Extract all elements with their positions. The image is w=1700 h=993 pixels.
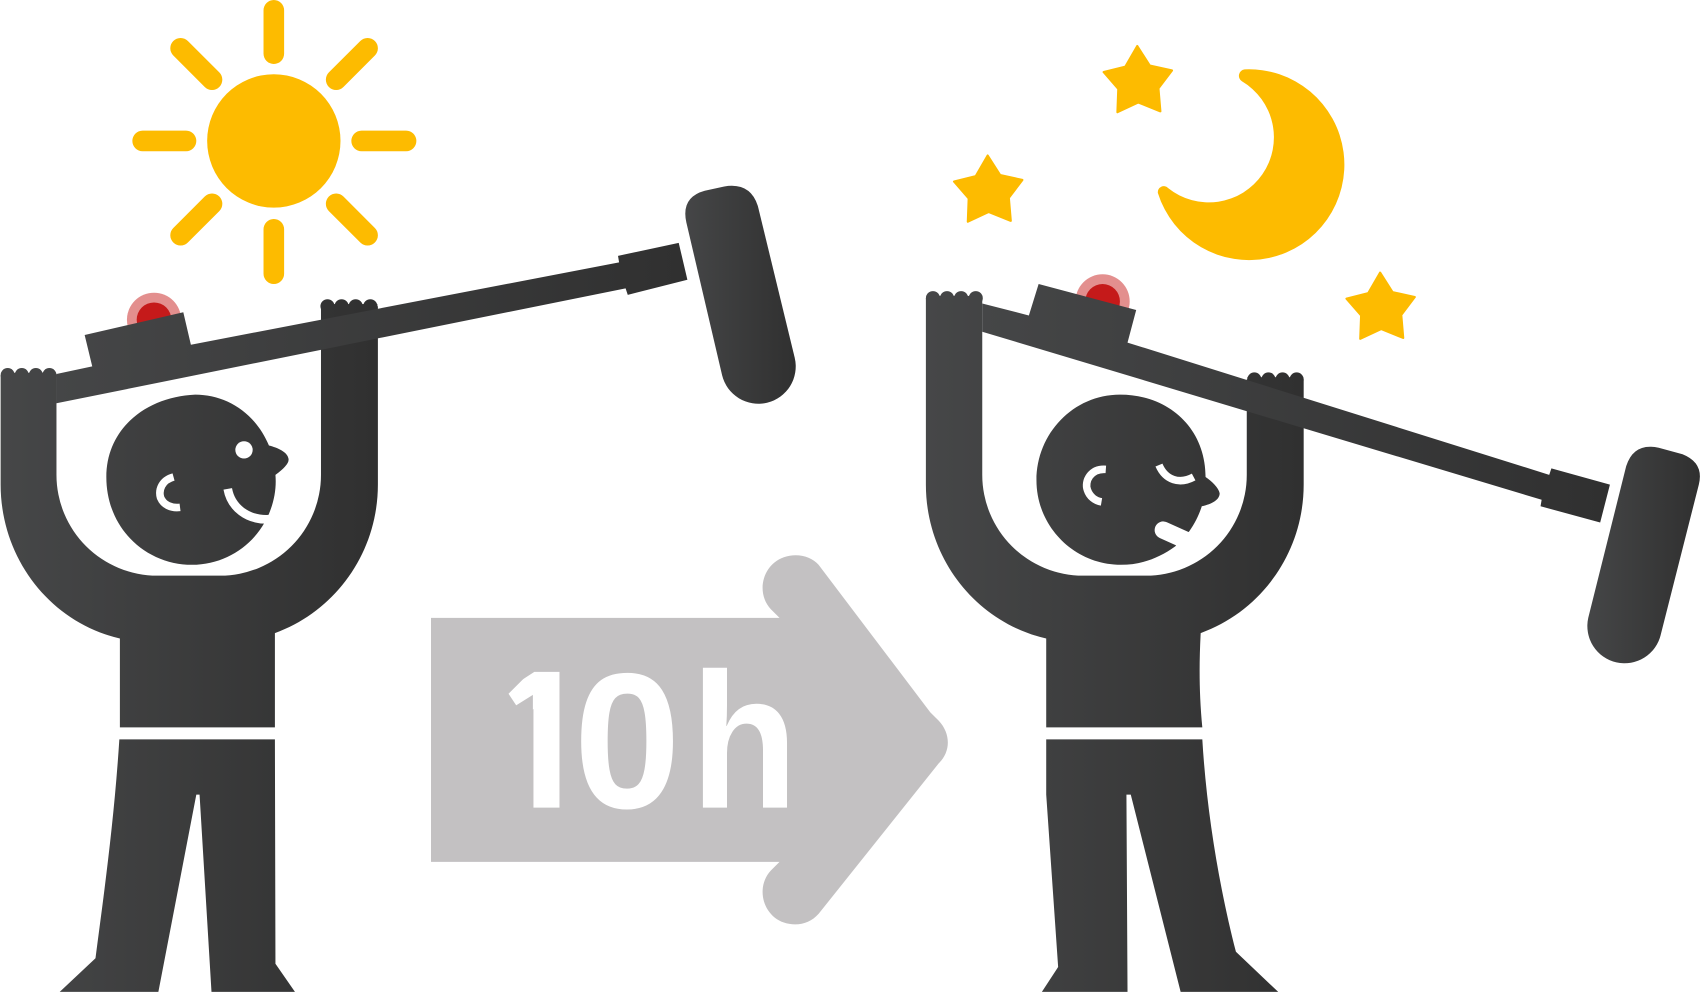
- label: 10h: 1: [487, 629, 597, 850]
- open mouth: [1163, 530, 1197, 545]
- legs: [1042, 739, 1278, 992]
- boom pole and microphone: [56, 186, 796, 404]
- label: 10h: [508, 668, 787, 810]
- icon: red recording light: [127, 293, 181, 347]
- head: [106, 395, 289, 565]
- eye: [235, 441, 253, 459]
- icon: moon: [1158, 69, 1344, 260]
- boom pole and microphone: [982, 284, 1700, 663]
- body and raised arms: [926, 291, 1304, 727]
- closed eye: [1159, 465, 1194, 481]
- ear: [1087, 469, 1106, 502]
- ear: [160, 477, 180, 508]
- body and raised arms: [1, 299, 378, 727]
- label: 10h: h: [691, 634, 798, 849]
- icon: red recording light: [1075, 274, 1130, 328]
- legs: [60, 739, 295, 992]
- icon: star right: [1346, 273, 1415, 339]
- arrow with duration: [431, 555, 948, 924]
- smile: [228, 489, 269, 519]
- head: [1036, 395, 1220, 565]
- icon: sun: [143, 10, 406, 274]
- figure: boom operator by night: [926, 274, 1700, 992]
- label: 10h: 0: [574, 633, 681, 849]
- icon: star left: [954, 156, 1022, 222]
- figure: boom operator by day: [1, 186, 796, 992]
- icon: star top: [1104, 46, 1172, 112]
